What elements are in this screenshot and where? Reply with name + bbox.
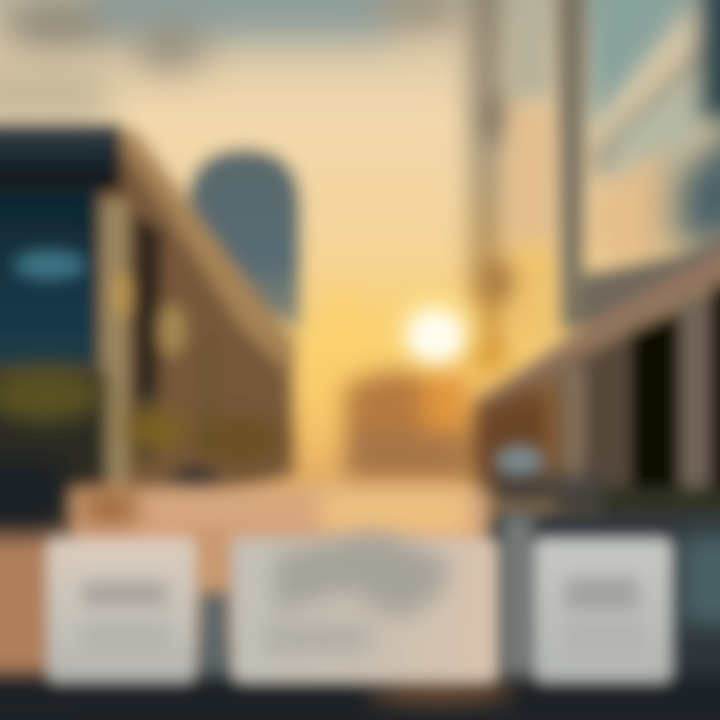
glass highlight [14,251,86,279]
text block: right card blurred body [565,622,645,652]
mid dark brown building [462,375,558,500]
dim band under right window [575,225,720,335]
diagonal roof beam [112,130,295,375]
blue glass wall [0,188,98,368]
street foreground [0,447,720,720]
sun glow [373,275,497,385]
sky background [0,0,720,530]
building facade in warm tones [0,130,295,525]
left building [0,124,295,532]
panel: center card [232,530,498,682]
right olive base strip [600,488,720,518]
tall beam 1 [468,0,508,370]
dark right edge [702,0,720,120]
columns [102,200,128,500]
text block: left card blurred body [80,622,170,652]
lower dark base with foliage [0,372,105,532]
small blue car [490,447,600,504]
text block: right card blurred heading [565,578,639,610]
diagonal beam [470,235,720,440]
distant round tower [188,150,300,335]
right structures [462,0,720,515]
text block: center card blurred body [262,625,372,653]
panel: right card [534,538,672,682]
low orange building under the sun [345,369,470,482]
panel: left card [47,538,196,682]
text block: center card blurred heading [275,530,450,618]
right slate ground [490,512,720,720]
upper right sky pane [585,0,715,135]
right building base [555,275,720,515]
text block: left card blurred heading [82,582,168,606]
dark roof band [0,124,120,190]
tall beam 2 [556,0,587,330]
